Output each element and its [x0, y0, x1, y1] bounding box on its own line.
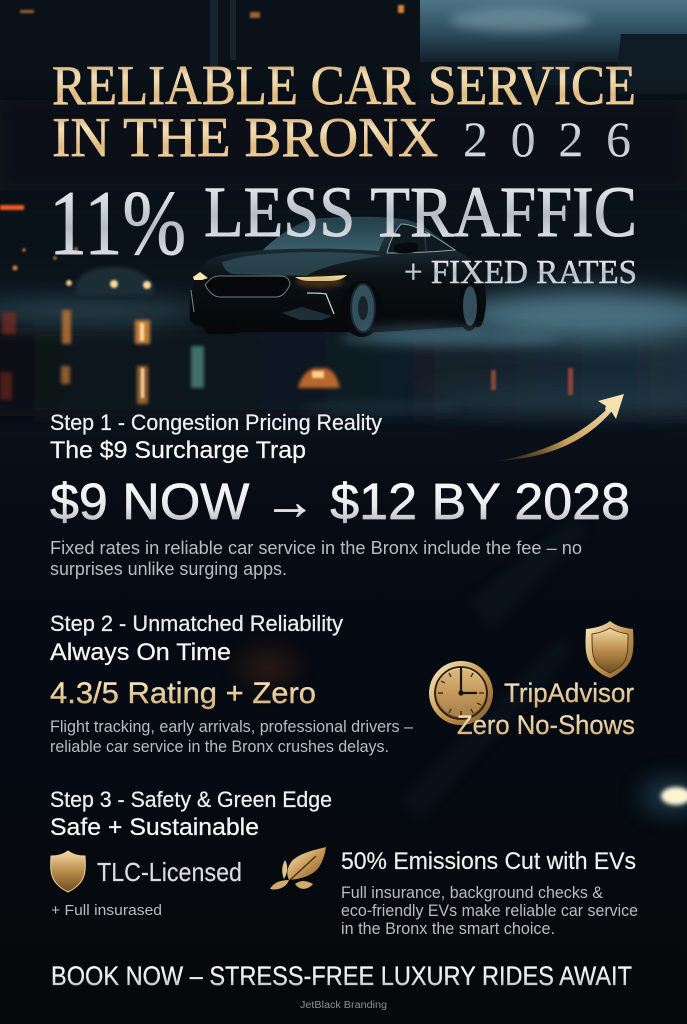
- headline: 11% less traffic: 11%: [49, 172, 186, 274]
- step 1 body text: surprises unlike surging apps.: [50, 559, 287, 579]
- badge text: TripAdvisor, Zero No-Shows: [457, 678, 635, 740]
- step 1 section: [50, 410, 630, 579]
- step 1 section: The $9 Surcharge Trap: [50, 437, 306, 464]
- emissions body text: eco-friendly EVs make reliable car service: [341, 901, 638, 920]
- emissions body text: Full insurance, background checks &: [341, 883, 604, 902]
- step 3 section: Safe + Sustainable: [50, 814, 259, 841]
- brand credit: JetBlack Branding: [300, 1000, 387, 1011]
- icon: small gold shield: [51, 851, 85, 892]
- step 2 body text: [50, 717, 414, 756]
- oncoming car in background: [66, 267, 154, 295]
- emissions body text: in the Bronx the smart choice.: [341, 919, 555, 938]
- icon: gold leaves: [270, 847, 326, 889]
- road reflections: [0, 310, 573, 404]
- badge text: TripAdvisor, Zero No-Shows: TripAdvisor: [504, 678, 634, 708]
- title: gold heading: RELIABLE CAR SERVICE: [52, 55, 636, 117]
- spray mist over tyres: [365, 324, 485, 340]
- emissions block: [341, 848, 638, 938]
- headline: 11% less traffic: LESS TRAFFIC: [204, 172, 637, 252]
- headline: 11% less traffic: [49, 172, 637, 274]
- big stat: fee increase: $9 NOW → $12 BY 2028: [50, 473, 630, 530]
- icon: gold clock: [429, 661, 493, 725]
- step 2 body text: reliable car service in the Bronx crushes delays.: [50, 737, 389, 756]
- step 1 body text: [50, 538, 582, 579]
- step 2 section: Always On Time: [50, 639, 231, 666]
- car illustration: [190, 217, 486, 337]
- step 2 section: Step 2 - Unmatched Reliability: [50, 611, 343, 636]
- gold stat: rating: 4.3/5 Rating + Zero: [50, 677, 316, 710]
- emissions body text: [341, 883, 638, 938]
- step 2 section: [50, 611, 414, 756]
- title: gold heading: [52, 55, 636, 169]
- icon: gold shield: [586, 621, 633, 678]
- caption: full insurance: + Full insurased: [51, 902, 162, 919]
- step 1 section: Step 1 - Congestion Pricing Reality: [50, 410, 382, 435]
- step 3 section: Step 3 - Safety & Green Edge: [50, 787, 332, 812]
- step 3 section: [50, 787, 332, 841]
- badge text: TripAdvisor, Zero No-Shows: Zero No-Shows: [457, 710, 635, 740]
- emissions block: 50% Emissions Cut with EVs: [341, 848, 636, 875]
- arrow: rising gold curve: [497, 394, 624, 461]
- step 1 body text: Fixed rates in reliable car service in the Bronx include the fee – no: [50, 538, 582, 558]
- step 2 body text: Flight tracking, early arrivals, professional drivers –: [50, 717, 414, 736]
- subheadline: fixed rates: + FIXED RATES: [404, 254, 637, 291]
- title year: 2026: 2026: [463, 111, 631, 167]
- label: TLC-Licensed: TLC-Licensed: [97, 857, 242, 887]
- title: gold heading: IN THE BRONX: [52, 107, 438, 169]
